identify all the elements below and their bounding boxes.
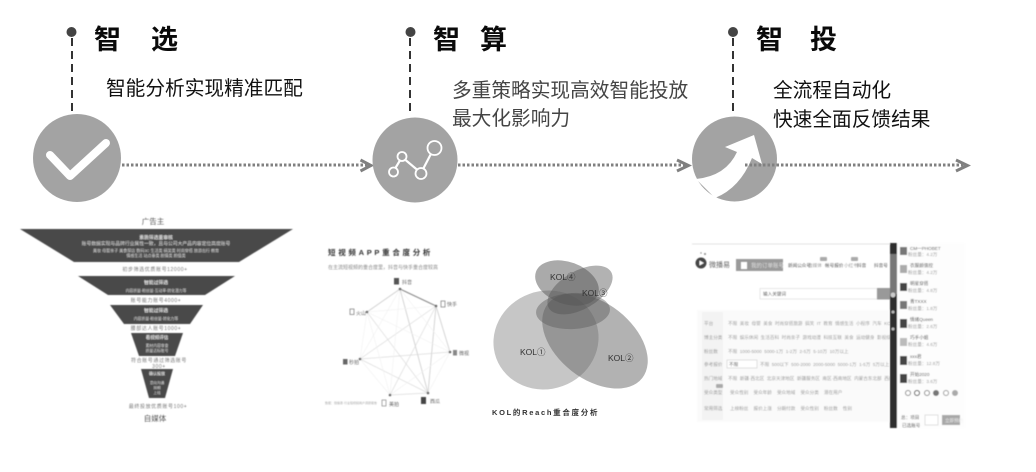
filter panel: 平台 bbox=[704, 320, 714, 327]
nav links: 帐号报价 bbox=[825, 262, 844, 269]
funnel tier 1: 账号数据实现与品牌行业属性一致，且与公司大产品内容定位高度账号 bbox=[82, 240, 231, 247]
venn ellipses bbox=[479, 252, 666, 408]
network nodes and labels: 抖音 bbox=[402, 279, 412, 286]
funnel tier 3 bbox=[110, 305, 203, 324]
sidebar account list: 粉丝量：12.8万 bbox=[908, 360, 940, 367]
nav links: 小红书 bbox=[844, 262, 858, 269]
heading 智算 bbox=[433, 25, 507, 55]
logo: 微播易 bbox=[709, 260, 730, 269]
sidebar account list: 粉丝量：4.8万 bbox=[908, 287, 938, 294]
funnel tier 5: 排期 bbox=[153, 385, 161, 390]
caption 4 bbox=[131, 357, 187, 370]
funnel tier 4: 素材内容审查 bbox=[146, 343, 169, 348]
funnel tier 5: 上线 bbox=[153, 390, 161, 395]
heading 智投: 投 bbox=[810, 25, 837, 55]
caption 4: 符合账号通过筛选账号 bbox=[131, 357, 187, 364]
arrow: step 1 to step 2 bbox=[122, 160, 371, 171]
marker dot and dashed line bbox=[66, 27, 76, 114]
filter panel: 博主分类 bbox=[704, 334, 723, 341]
filter panel: 上榜粉丝 报价上涨 分期付款 受众性别 粉丝数 性别 bbox=[730, 405, 852, 412]
nav links: 新闻公众号 bbox=[788, 262, 811, 269]
icon: rising arrow bbox=[692, 116, 777, 202]
description bbox=[773, 80, 930, 131]
marker dot and dashed line bbox=[728, 27, 738, 114]
description: 全流程自动化 bbox=[773, 80, 891, 102]
chart title: 短视频APP重合度分析 bbox=[328, 247, 433, 257]
label KOL④: KOL④ bbox=[550, 272, 576, 282]
network nodes and labels: 微视 bbox=[459, 350, 469, 357]
top rule bbox=[692, 243, 890, 245]
sidebar round icons bbox=[906, 390, 958, 396]
network nodes and labels: 快手 bbox=[447, 301, 457, 308]
sidebar account list: 粉丝量：1.8万 bbox=[908, 305, 938, 312]
funnel tier 2 bbox=[78, 276, 235, 295]
marker dot and dashed line bbox=[406, 27, 416, 114]
description: 多重策略实现高效智能投放 bbox=[452, 80, 689, 102]
logo bbox=[696, 252, 730, 269]
chart subtitle: 在主流短视频的重合度里，抖音与快手重合度较高 bbox=[328, 264, 438, 271]
nav button: 我的订单账号 bbox=[751, 262, 785, 270]
label KOL③: KOL③ bbox=[582, 288, 608, 298]
heading 智算: 算 bbox=[480, 25, 507, 55]
step 3: 智投 bbox=[692, 25, 968, 202]
filter panel: 受众类型 bbox=[704, 389, 723, 396]
venn diagram: KOL reach overlap bbox=[479, 252, 666, 417]
sidebar account list bbox=[897, 243, 965, 428]
sidebar footer buttons: 已选账号 bbox=[902, 422, 921, 429]
label KOL②: KOL② bbox=[608, 353, 634, 363]
filter panel: 热门地域 bbox=[704, 375, 723, 382]
arrow: step 2 to step 3 bbox=[458, 160, 688, 171]
nav links: 抖音号 bbox=[874, 262, 888, 269]
funnel tier 1 bbox=[20, 229, 293, 262]
caption 4: 300+ bbox=[152, 364, 166, 370]
funnel tier 2: 内容质量·粉丝量·互动率·转化潜力等 bbox=[126, 288, 187, 293]
label KOL①: KOL① bbox=[520, 347, 546, 357]
sidebar footer buttons bbox=[901, 414, 963, 429]
sidebar account list: 粉丝量：4.6万 bbox=[908, 341, 938, 348]
filter panel: 参考报价 bbox=[704, 361, 723, 368]
nav button bbox=[736, 259, 785, 271]
funnel tier 5 bbox=[141, 369, 173, 398]
icon: check mark bbox=[33, 114, 121, 202]
filter panel: 不限 1000-5000 5000-1万 1-2万 2-5万 5-10万 10万以上 bbox=[728, 348, 849, 355]
sidebar account list: xxx君 bbox=[910, 354, 922, 360]
label 自媒体: 自媒体 bbox=[144, 413, 167, 423]
filter panel: 不限 bbox=[729, 361, 739, 368]
sidebar account list: 开始2020 bbox=[910, 371, 930, 378]
caption 2: 账号能力账号4000+ bbox=[131, 297, 181, 304]
sidebar footer buttons: 总：项目 bbox=[901, 414, 919, 421]
network nodes and labels: 火山 bbox=[356, 310, 366, 317]
step 2: 智算 bbox=[372, 25, 689, 202]
caption 3: 腰部达人账号1000+ bbox=[131, 325, 181, 332]
sidebar account list: 粉丝量：2.6万 bbox=[908, 323, 938, 330]
heading 智投: 智 bbox=[756, 25, 783, 55]
funnel tier 1: 美妆 母婴亲子 美食探店 数码3C 生活类 搞笑类 时尚穿搭 旅游出行 教育 bbox=[93, 247, 219, 253]
funnel tier 5: 确认投放 bbox=[149, 370, 165, 376]
filter panel: 不限 新疆·西北区 北京天津地区 新疆服务区 南区·西南地区 内蒙古东北部 西南地区 bbox=[728, 375, 903, 382]
sidebar account list: 粉丝量：4.2万 bbox=[908, 269, 938, 276]
heading 智选: 选 bbox=[151, 25, 178, 55]
funnel tier 1: 情感生活 站点垂类 剧情类 颜值类 bbox=[126, 252, 186, 258]
nav links: 自媒体 bbox=[808, 262, 822, 269]
description bbox=[452, 80, 689, 130]
description: 快速全面反馈结果 bbox=[773, 109, 930, 131]
filter panel: 不限 500以下 500-2000 2000-5000 5000-1万 1-5万 5万以上 bbox=[760, 361, 890, 368]
funnel tier 3: 内容质量·粉丝量·转化力等 bbox=[134, 316, 178, 321]
filter panel: 受众性别 受众年龄 受众地域 受众分类 潜在用户 bbox=[730, 389, 842, 396]
website screenshot bbox=[692, 243, 965, 429]
source note: 数据：微播易·行业短视频用户调研报告 bbox=[325, 400, 377, 405]
sidebar dark strip bbox=[890, 243, 898, 428]
funnel tier 3: 智能过筛选 bbox=[144, 307, 168, 314]
sidebar account list: 粉丝量：3.6万 bbox=[908, 378, 938, 385]
filter panel: 粉丝数 bbox=[704, 348, 718, 355]
nav links bbox=[788, 257, 888, 269]
description: 最大化影响力 bbox=[452, 108, 570, 130]
sidebar account list: 青TXXX bbox=[910, 298, 927, 305]
network lines bbox=[360, 289, 450, 395]
heading 智选: 智 bbox=[94, 25, 121, 55]
network nodes and labels: 秒拍 bbox=[349, 359, 359, 366]
funnel tier 5: 意向沟通 bbox=[150, 380, 165, 385]
search box: 输入关键词 bbox=[763, 290, 786, 298]
sidebar account list: 巧手小姐 bbox=[910, 334, 929, 341]
sidebar account list: 情绪Queen bbox=[910, 316, 933, 323]
filter panel: 不限 娱乐休闲 生活百科 时尚亲子 游戏动漫 科技互联 美食 运动健身 影视综艺 情感 bbox=[728, 334, 908, 341]
icon: line chart nodes bbox=[372, 118, 458, 202]
sidebar account list: CM一PHOBET bbox=[910, 246, 941, 251]
sidebar footer buttons: 立即预约 bbox=[945, 417, 963, 424]
funnel tier 1: 素质筛选重审核 bbox=[139, 234, 173, 241]
funnel tier 2: 智能过筛选 bbox=[144, 279, 168, 286]
search box bbox=[760, 288, 890, 300]
sidebar account list: 明星穿搭 bbox=[910, 280, 929, 287]
network nodes and labels: 西瓜 bbox=[430, 399, 440, 405]
caption 5: 最终投放优质账号100+ bbox=[129, 403, 187, 410]
heading 智投 bbox=[756, 25, 837, 55]
nav links: 抖音 bbox=[857, 262, 867, 269]
venn caption: KOL的Reach重合度分析 bbox=[492, 407, 599, 417]
funnel tier 4: 看视频评估 bbox=[146, 334, 169, 341]
funnel tier 4 bbox=[131, 333, 183, 356]
caption 1: 初步筛选优质账号12000+ bbox=[122, 266, 188, 273]
network nodes and labels: 美拍 bbox=[389, 401, 399, 408]
funnel tier 4: 质量达标账号 bbox=[146, 348, 169, 353]
network nodes and labels bbox=[343, 278, 469, 408]
step 1: 智选 bbox=[33, 25, 371, 202]
label 广告主: 广告主 bbox=[142, 216, 165, 226]
heading 智算: 智 bbox=[433, 25, 460, 55]
filter panel bbox=[697, 310, 908, 422]
heading 智选 bbox=[94, 25, 178, 55]
network chart: short video app overlap bbox=[325, 247, 469, 408]
sidebar account list: 衣服颜值控 bbox=[910, 262, 933, 269]
description: 智能分析实现精准匹配 bbox=[106, 78, 303, 100]
sidebar account list: 粉丝量：4.2万 bbox=[908, 251, 938, 258]
filter panel: 不限 美妆 母婴 美食 时尚穿搭旅游 搞笑 IT 教育 情感生活 小程序 汽车 KOL bbox=[728, 320, 894, 327]
filter panel: 常用筛选 bbox=[704, 405, 723, 412]
funnel chart bbox=[20, 216, 293, 423]
arrow: step 3 onward bbox=[745, 160, 968, 171]
